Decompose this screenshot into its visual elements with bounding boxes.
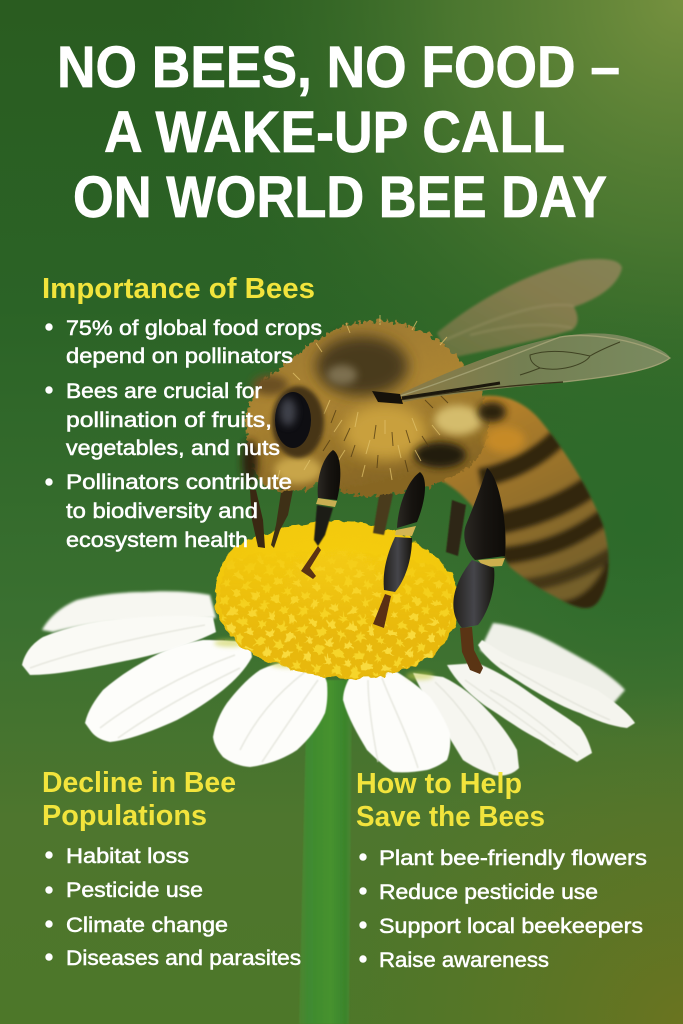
heading: Populations	[42, 800, 207, 832]
back petals	[22, 591, 635, 776]
front petals	[85, 640, 450, 772]
bullet list: 75% of global food crops	[66, 316, 322, 340]
bullet list: ecosystem health	[66, 528, 248, 552]
petal shadow lines	[175, 640, 225, 650]
heading: Importance of Bees	[42, 273, 315, 305]
thorax markings	[242, 336, 525, 484]
abdomen	[440, 394, 610, 610]
heading	[42, 767, 236, 832]
title	[57, 35, 620, 230]
bullet list: Pollinators contribute	[66, 470, 292, 494]
title: ON WORLD BEE DAY	[73, 165, 607, 230]
bullet list: Raise awareness	[379, 948, 549, 972]
bullet list: vegetables, and nuts	[66, 436, 280, 460]
heading: Decline in Bee	[42, 767, 236, 799]
petal grooves	[30, 625, 610, 770]
bullet list	[45, 316, 322, 552]
panel: decline in bee populations	[42, 767, 301, 970]
bullet list: pollination of fruits,	[66, 408, 272, 432]
legs	[250, 450, 506, 674]
heading: Save the Bees	[356, 801, 545, 833]
bullet list	[45, 844, 301, 970]
bullet list: Habitat loss	[66, 844, 189, 868]
fur strands	[277, 315, 448, 481]
title: A WAKE-UP CALL	[104, 100, 565, 165]
flower centre	[215, 521, 458, 679]
hind leg	[453, 468, 506, 674]
panel: how to help save the bees	[356, 768, 647, 972]
bullet list: Plant bee-friendly flowers	[379, 846, 647, 870]
panel: importance of bees	[42, 273, 322, 552]
petal base tint	[214, 639, 434, 680]
title: NO BEES, NO FOOD –	[57, 35, 620, 100]
bullet list: Pesticide use	[66, 878, 203, 902]
bullet list: depend on pollinators	[66, 344, 293, 368]
bullet list: Support local beekeepers	[379, 914, 643, 938]
front leg	[301, 450, 340, 579]
heading	[356, 768, 545, 833]
heading: How to Help	[356, 768, 522, 800]
far legs	[271, 486, 466, 556]
bullet list: Bees are crucial for	[66, 379, 262, 403]
bullet list: Climate change	[66, 913, 228, 937]
daisy flower	[22, 521, 635, 776]
front wing	[372, 333, 670, 404]
flower stem	[299, 680, 352, 1024]
bullet list: Diseases and parasites	[66, 946, 301, 970]
antenna	[250, 490, 265, 548]
back wing	[437, 259, 622, 358]
bullet list: Reduce pesticide use	[379, 880, 598, 904]
honey bee	[242, 259, 670, 674]
middle leg	[373, 472, 425, 628]
abdomen stripes	[476, 430, 610, 610]
thorax and head fur	[242, 315, 525, 496]
eye	[272, 386, 324, 458]
bullet list: to biodiversity and	[66, 499, 258, 523]
bullet list	[359, 846, 647, 972]
